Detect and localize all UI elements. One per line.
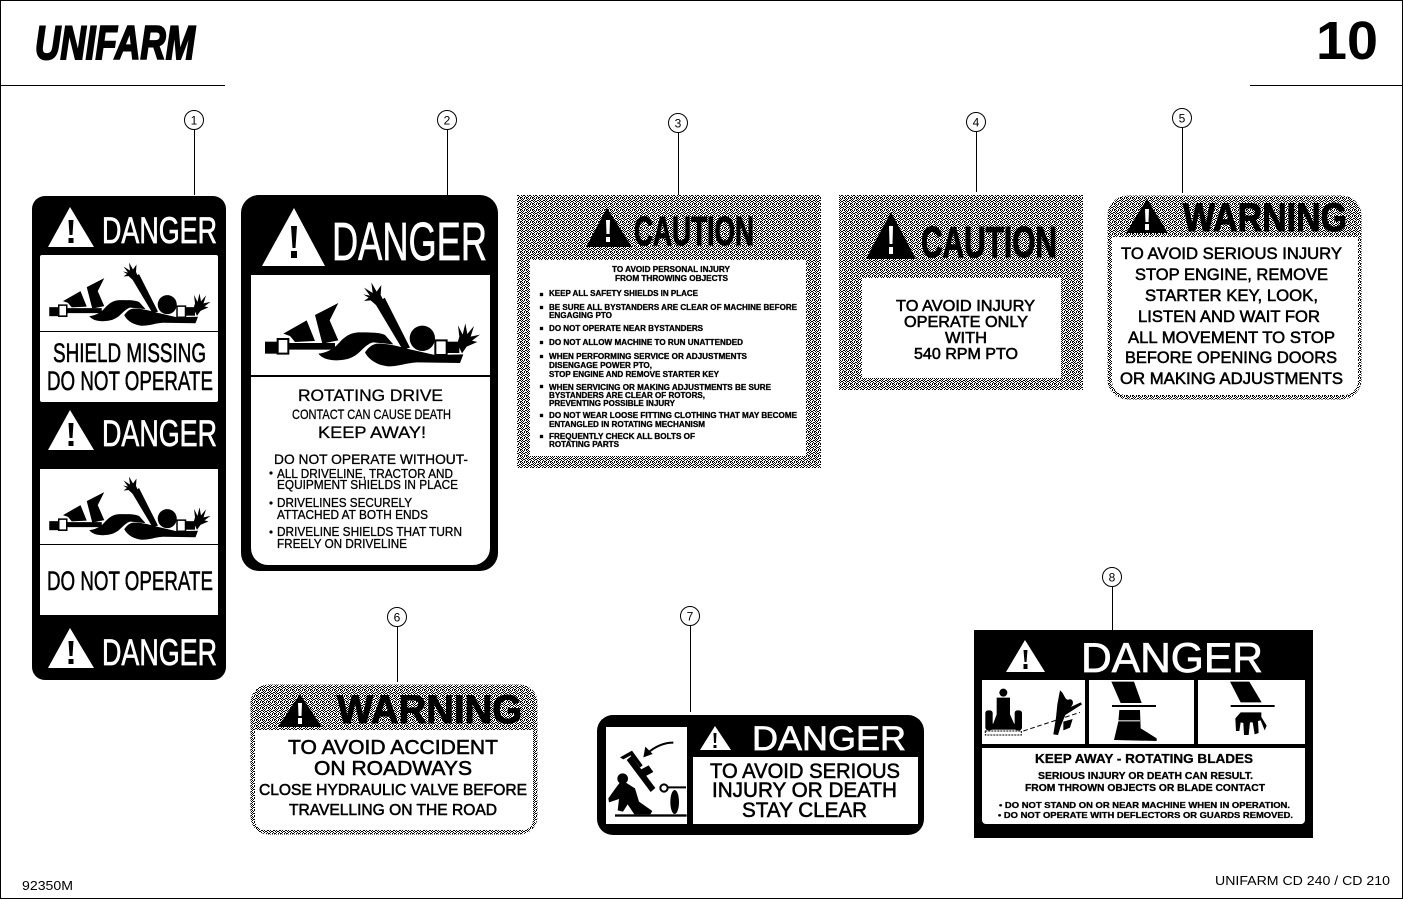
- page number: 10: [1316, 11, 1378, 71]
- caution rules text: ROTATING PARTS: [549, 440, 620, 449]
- caution triangle: [866, 212, 916, 259]
- warning message: TO AVOID ACCIDENT: [288, 737, 498, 759]
- second danger word: DANGER: [102, 413, 217, 454]
- callout 6: [388, 608, 406, 682]
- caution rules text: DO NOT WEAR LOOSE FITTING CLOTHING THAT MAY BECOME: [549, 411, 798, 420]
- caution rules text: ENGAGING PTO: [549, 311, 612, 320]
- white message box: [862, 278, 1061, 378]
- white content box: [251, 275, 490, 565]
- first danger triangle: [48, 207, 94, 247]
- warning word: WARNING: [1183, 196, 1347, 240]
- pto message: 540 RPM PTO: [914, 346, 1018, 363]
- rotating drive text: DRIVELINES SECURELY: [277, 496, 413, 510]
- panel 7: stay clear danger decal: [597, 715, 924, 835]
- pto message: [896, 298, 1035, 363]
- caution rules text: BE SURE ALL BYSTANDERS ARE CLEAR OF MACHINE BEFORE: [549, 303, 798, 312]
- rotating drive text: ROTATING DRIVE: [298, 386, 443, 405]
- callout 8: [1102, 568, 1122, 630]
- callout 4: 4: [973, 116, 980, 130]
- warning word: WARNING: [337, 688, 522, 732]
- danger triangle: [700, 726, 731, 750]
- rotating blades message: FROM THROWN OBJECTS OR BLADE CONTACT: [1025, 783, 1265, 794]
- caution rules text: FROM THROWING OBJECTS: [615, 274, 729, 283]
- warning message: [1120, 244, 1343, 388]
- rotating drive figure: [265, 282, 480, 366]
- first illustrated box: [40, 255, 218, 402]
- model footer: UNIFARM CD 240 / CD 210: [1215, 874, 1390, 888]
- rotating drive text: CONTACT CAN CAUSE DEATH: [292, 406, 451, 422]
- caution rules text: [540, 265, 798, 449]
- first illustrated box: SHIELD MISSING: [53, 338, 206, 368]
- rotating blades message: • DO NOT OPERATE WITH DEFLECTORS OR GUARDS REMOVED.: [998, 810, 1293, 820]
- warning message: TRAVELLING ON THE ROAD: [289, 802, 497, 819]
- caution rules text: STOP ENGINE AND REMOVE STARTER KEY: [549, 370, 720, 379]
- danger word: DANGER: [752, 720, 906, 758]
- pictogram: boot under blade: [1089, 680, 1194, 744]
- caution rules text: WHEN PERFORMING SERVICE OR ADJUSTMENTS: [549, 352, 748, 361]
- white message area: [1112, 237, 1358, 395]
- stay clear message: [710, 760, 900, 822]
- panel 1: shield missing danger decal: [32, 196, 226, 680]
- rotating blades message: KEEP AWAY - ROTATING BLADES: [1035, 751, 1253, 766]
- callout 1: 1: [191, 114, 198, 128]
- caution rules text: DO NOT OPERATE NEAR BYSTANDERS: [549, 324, 704, 333]
- pictogram: operator and thrown object: [982, 680, 1085, 744]
- caution triangle: [586, 208, 632, 247]
- pto message: OPERATE ONLY: [904, 314, 1028, 331]
- rotating drive text: ALL DRIVELINE, TRACTOR AND: [277, 467, 453, 481]
- danger triangle: [1006, 640, 1045, 672]
- white message box: [982, 748, 1305, 824]
- third danger word: DANGER: [102, 632, 217, 673]
- warning message: CLOSE HYDRAULIC VALVE BEFORE: [259, 782, 527, 799]
- panel 5: warning stop engine decal: [1108, 196, 1362, 400]
- caution rules text: PREVENTING POSSIBLE INJURY: [549, 399, 676, 408]
- first danger word: DANGER: [102, 210, 217, 251]
- rotating drive text: [270, 386, 468, 551]
- caution rules text: KEEP ALL SAFETY SHIELDS IN PLACE: [549, 289, 699, 298]
- rotating drive text: ATTACHED AT BOTH ENDS: [277, 508, 428, 522]
- second illustrated box: DO NOT OPERATE: [47, 566, 213, 596]
- panel 2: rotating drive danger decal: [241, 195, 498, 571]
- stay clear message: TO AVOID SERIOUS: [710, 760, 900, 783]
- callout 4: [966, 112, 986, 192]
- rotating blades message: • DO NOT STAND ON OR NEAR MACHINE WHEN IN OPERATION.: [999, 800, 1290, 810]
- first illustrated box: DO NOT OPERATE: [47, 366, 213, 396]
- caution rules text: DO NOT ALLOW MACHINE TO RUN UNATTENDED: [549, 338, 743, 347]
- callout 5: 5: [1179, 112, 1186, 126]
- danger triangle: [262, 208, 325, 266]
- caution rules text: DISENGAGE POWER PTO,: [549, 361, 652, 370]
- callout 3: [668, 114, 688, 195]
- pto message: WITH: [945, 330, 987, 347]
- callout 8: 8: [1109, 570, 1116, 584]
- caution word: CAUTION: [921, 218, 1057, 267]
- warning message: OR MAKING ADJUSTMENTS: [1120, 369, 1343, 388]
- rotating blades message: SERIOUS INJURY OR DEATH CAN RESULT.: [1038, 771, 1253, 782]
- hazard pictogram box: [606, 727, 687, 824]
- rotating drive text: KEEP AWAY!: [318, 423, 426, 442]
- rotating drive text: EQUIPMENT SHIELDS IN PLACE: [277, 478, 458, 492]
- callout 7: 7: [687, 610, 694, 624]
- rotating drive text: FREELY ON DRIVELINE: [277, 537, 407, 551]
- caution rules text: WHEN SERVICING OR MAKING ADJUSTMENTS BE SURE: [549, 383, 772, 392]
- panel 4: caution 540 rpm decal: [839, 195, 1083, 390]
- warning message: STARTER KEY, LOOK,: [1145, 286, 1318, 305]
- panel 6: warning roadways decal: [250, 684, 538, 834]
- caution rules text: FREQUENTLY CHECK ALL BOLTS OF: [549, 432, 695, 441]
- second illustrated box: [40, 469, 218, 615]
- danger word: DANGER: [1081, 634, 1263, 681]
- white rules box: [530, 260, 806, 456]
- pto message: TO AVOID INJURY: [896, 298, 1035, 315]
- stay clear message: STAY CLEAR: [742, 799, 867, 822]
- message box: [693, 757, 918, 824]
- second danger triangle: [48, 410, 94, 450]
- warning message: ON ROADWAYS: [314, 758, 472, 780]
- pictogram: hand under blade: [1198, 680, 1305, 744]
- third danger triangle: [48, 628, 94, 668]
- panel 8: rotating blades danger decal: [974, 630, 1313, 838]
- callout 7: [680, 606, 700, 712]
- warning message: STOP ENGINE, REMOVE: [1135, 265, 1328, 284]
- part code footer: 92350M: [22, 878, 73, 893]
- warning triangle: [1126, 199, 1168, 233]
- callout 2: [438, 110, 456, 195]
- callout 5: [1172, 108, 1192, 193]
- warning message: BEFORE OPENING DOORS: [1125, 348, 1337, 367]
- warning message: [259, 737, 527, 819]
- rotating blades message: [998, 751, 1293, 820]
- rotating drive text: DO NOT OPERATE WITHOUT-: [274, 451, 468, 467]
- caution rules text: TO AVOID PERSONAL INJURY: [612, 265, 731, 274]
- warning triangle: [278, 694, 322, 727]
- stay clear message: INJURY OR DEATH: [712, 779, 897, 802]
- caution rules text: BYSTANDERS ARE CLEAR OF ROTORS,: [549, 391, 705, 400]
- rotating drive text: DRIVELINE SHIELDS THAT TURN: [277, 525, 462, 539]
- white message area: [255, 730, 533, 830]
- warning message: TO AVOID SERIOUS INJURY: [1121, 244, 1342, 263]
- callout 6: 6: [394, 610, 401, 624]
- callout 3: 3: [675, 116, 682, 130]
- caution rules text: ENTANGLED IN ROTATING MECHANISM: [549, 420, 705, 429]
- danger word: DANGER: [332, 212, 487, 272]
- caution word: CAUTION: [634, 208, 754, 254]
- callout 2: 2: [444, 114, 451, 128]
- panel 3: caution personal injury decal: [517, 195, 821, 468]
- warning message: LISTEN AND WAIT FOR: [1138, 307, 1320, 326]
- warning message: ALL MOVEMENT TO STOP: [1128, 328, 1335, 347]
- brand logo: UNIFARM: [35, 16, 196, 69]
- callout 1: [184, 110, 204, 195]
